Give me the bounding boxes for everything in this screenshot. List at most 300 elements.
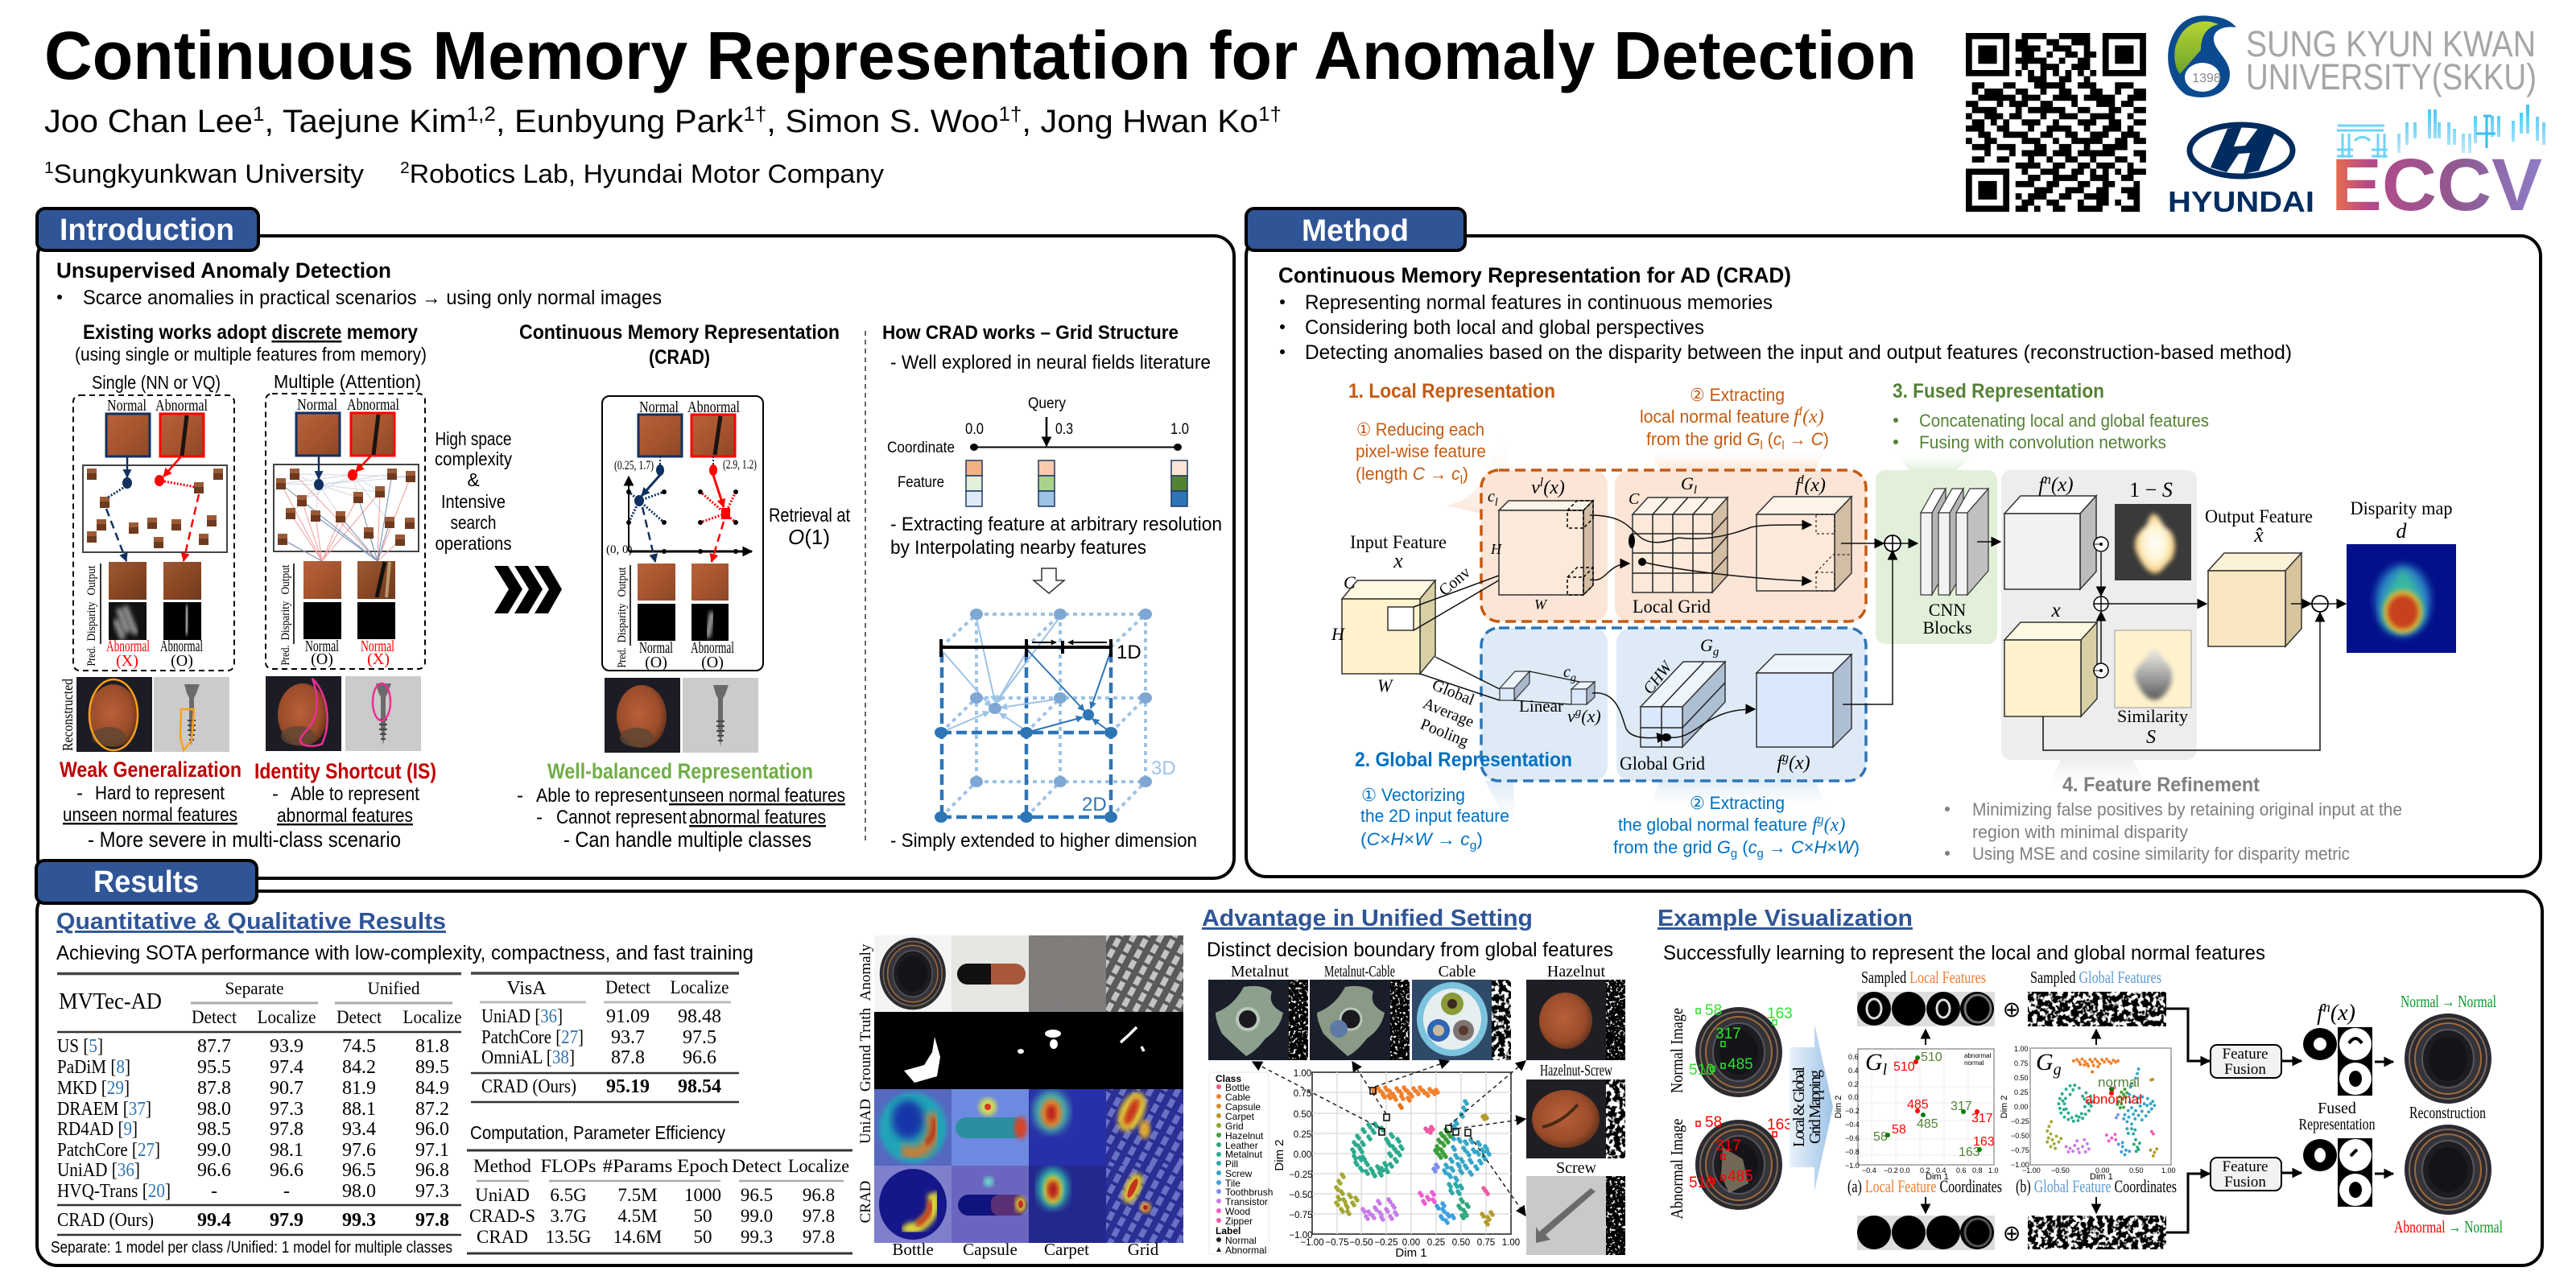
table: computation: UniAD <box>475 1185 530 1205</box>
text: well-balanced representation: - <box>536 807 543 828</box>
heading: existing works: Multiple (Attention) <box>274 371 421 392</box>
table: MVTec-AD: HVQ-Trans [20] <box>57 1181 171 1202</box>
diagram: continuous memory CRAD: Normal <box>639 639 673 657</box>
text: identity shortcut: abnormal features <box>277 805 413 827</box>
images: input bottles with points: 58 <box>1705 1002 1722 1019</box>
authors: 1,2 <box>467 103 496 126</box>
table: MVTec-AD: - <box>211 1181 217 1202</box>
table: VisA: 97.5 <box>683 1027 716 1048</box>
diagram: single memory retrieval: Abnormal <box>155 397 208 415</box>
table: computation: 14.6M <box>613 1227 662 1247</box>
images: unified setting samples: Metalnut-Cable <box>1324 963 1395 980</box>
authors: , Taejune Kim <box>264 104 467 139</box>
table: MVTec-AD: 97.8 <box>270 1119 303 1140</box>
images: unified setting samples: Metalnut <box>1231 963 1290 980</box>
diagram: local branch <box>1488 473 1852 617</box>
table: computation: 99.3 <box>741 1227 773 1247</box>
table: computation: 50 <box>694 1206 712 1226</box>
table: computation: 1000 <box>684 1185 721 1205</box>
heading tab: Results <box>36 861 257 903</box>
table: MVTec-AD: Detect <box>336 1007 382 1027</box>
images: unified setting samples: Screw <box>1556 1159 1597 1177</box>
legend: Toothbrush <box>1225 1187 1273 1198</box>
diagram: 1D 2D 3D grid: 2D <box>1082 794 1107 815</box>
chart: global feature t-SNE: Dim 1 <box>1395 1246 1427 1260</box>
text: complexity note: High space <box>435 428 512 449</box>
chart: local feature coordinates: G <box>1865 1049 1883 1075</box>
table: MVTec-AD: 87.2 <box>415 1099 449 1120</box>
images: unified setting samples: Cable <box>1439 963 1476 980</box>
text: retrieval at O(1): Retrieval at <box>769 505 850 526</box>
table: MVTec-AD: 99.3 <box>342 1210 376 1231</box>
bullet: scarce anomalies: Scarce anomalies in practical scenarios → using only normal images <box>83 287 662 309</box>
diagram: multiple memory attention: (O) <box>311 650 333 668</box>
table: VisA: PatchCore [27] <box>481 1027 584 1048</box>
table: MVTec-AD: 97.1 <box>415 1140 449 1161</box>
images: input bottles with points: 510 <box>1689 1062 1715 1079</box>
table: VisA: 98.54 <box>678 1076 721 1097</box>
diagram: local branch: C <box>1629 490 1640 508</box>
text: fused representation: Fusing with convolution networks <box>1919 432 2166 452</box>
legend: Label <box>1216 1225 1241 1236</box>
chart: local feature coordinates: −0.4 <box>1845 1121 1860 1129</box>
chart: global feature t-SNE: −0.25 <box>1289 1170 1313 1180</box>
text: local representation: pixel-wise feature <box>1356 441 1486 461</box>
text: complexity note: Intensive <box>441 491 506 512</box>
chart: global feature coordinates: Dim 1 <box>2090 1172 2113 1182</box>
diagram: local branch: (x) <box>1543 477 1565 498</box>
diagram: 1D coordinate interpolation <box>887 395 1189 506</box>
images: unified setting samples: Hazelnut <box>1547 963 1606 980</box>
chart: global feature coordinates: 0.00 <box>2095 1166 2110 1174</box>
text: complexity note: operations <box>435 533 512 554</box>
text: fused representation <box>1893 380 2209 452</box>
diagram: global branch: CHW <box>1640 657 1677 698</box>
chart: global feature coordinates: 1.00 <box>2014 1045 2029 1053</box>
text: well-balanced representation: Able to represent <box>536 785 667 807</box>
image grid: qualitative results: Ground Truth <box>857 1008 874 1092</box>
text: fused representation: Concatenating local and global features <box>1919 411 2209 431</box>
logo: Hyundai <box>2168 125 2314 218</box>
table: MVTec-AD: 74.5 <box>342 1036 376 1057</box>
chart: global feature t-SNE: 0.25 <box>1427 1238 1445 1248</box>
chart: global feature t-SNE: 0.50 <box>1294 1110 1311 1120</box>
text: table note: Separate: 1 model per class /Unified: 1 model for multiple classes <box>51 1239 452 1257</box>
text: identity shortcut: - <box>272 783 279 805</box>
table: MVTec-AD: 98.1 <box>270 1140 303 1161</box>
diagram: continuous memory CRAD: (0, 0) <box>606 543 633 556</box>
diagram: continuous memory CRAD: (0.25, 1.7) <box>614 459 654 473</box>
chart: global feature coordinates: 0.25 <box>2014 1088 2029 1096</box>
arrow: local and global grid mapping <box>1790 1024 1833 1191</box>
legend: Class <box>1216 1073 1241 1084</box>
images: input bottles with points: 485 <box>1728 1056 1753 1073</box>
diagram: 1D coordinate interpolation: Feature <box>898 474 944 491</box>
table: MVTec-AD: 98.5 <box>197 1119 231 1140</box>
heading tab: Method: Method <box>1302 214 1409 248</box>
image grid: qualitative results: UniAD <box>857 1099 874 1144</box>
chart: global feature coordinates: −0.50 <box>2051 1166 2070 1174</box>
heading: computation efficiency: Computation, Parameter Efficiency <box>470 1122 725 1143</box>
bullets: method summary: Representing normal features in continuous memories <box>1305 291 1773 314</box>
diagram: CNN blocks: Blocks <box>1922 617 1972 638</box>
images: input bottles with points: 317 <box>1715 1137 1741 1154</box>
text: global representation <box>1355 749 1860 861</box>
chart: global feature coordinates: −0.50 <box>2011 1132 2029 1140</box>
images: reconstruction: Abnormal → Normal <box>2394 1217 2503 1236</box>
images: input bottles with points: 163 <box>1767 1117 1793 1133</box>
text: global representation: c <box>1748 837 1757 857</box>
diagram: global branch: g <box>1575 706 1582 719</box>
diagram: continuous memory CRAD <box>602 396 763 671</box>
text: global representation: C×H×W) <box>1791 837 1860 857</box>
chart: global feature coordinates <box>2000 1045 2176 1182</box>
chart: global feature t-SNE: −0.50 <box>1289 1191 1313 1200</box>
authors: , Eunbyung Park <box>496 104 744 139</box>
table: MVTec-AD: 95.5 <box>197 1057 231 1078</box>
scatter points <box>1336 1088 1491 1222</box>
chart: global feature coordinates: abnormal <box>2085 1092 2142 1107</box>
table: computation: 96.8 <box>803 1185 835 1205</box>
box: feature fusion top: Feature <box>2223 1046 2268 1063</box>
chart: global feature coordinates: Dim 2 <box>2000 1096 2009 1118</box>
diagram: feature refinement block <box>2004 472 2320 750</box>
diagram: global branch: v <box>1567 706 1575 726</box>
table: VisA <box>471 973 739 1102</box>
text: local representation: l <box>1781 439 1785 452</box>
authors: 1† <box>999 103 1022 126</box>
chart: global feature coordinates: −1.00 <box>2011 1161 2029 1169</box>
chart: local feature coordinates: 0.8 <box>1972 1166 1983 1174</box>
text: global representation: → <box>1764 837 1791 857</box>
text: simply extended: - Simply extended to higher dimension <box>890 830 1197 852</box>
table: computation: 7.5M <box>617 1185 658 1205</box>
table: MVTec-AD: Unified <box>367 978 420 998</box>
table: MVTec-AD: Localize <box>402 1007 462 1027</box>
diagram: local branch: v <box>1531 477 1540 498</box>
text: weak generalization <box>60 758 242 826</box>
text: global representation: the global normal feature <box>1618 815 1807 835</box>
diagram: multiple memory attention: Normal <box>361 638 394 655</box>
images: fused representation <box>2299 999 2375 1207</box>
chart: global feature t-SNE: −0.75 <box>1325 1238 1349 1248</box>
table: MVTec-AD: 97.3 <box>415 1181 449 1202</box>
chart: local feature coordinates: l <box>1883 1061 1888 1079</box>
diagram: input feature cuboid: Conv <box>1435 564 1474 600</box>
logo text: Sungkyunkwan University: UNIVERSITY(SKKU) <box>2246 56 2537 97</box>
text: complexity note: complexity <box>435 448 512 469</box>
diagram: global branch: g <box>1571 672 1576 684</box>
labels: sampled features <box>1861 968 2161 987</box>
legend: Bottle <box>1225 1082 1250 1093</box>
text: identity shortcut: Able to represent <box>291 783 419 805</box>
chart: global feature t-SNE: Dim 2 <box>1273 1139 1286 1171</box>
feature strips: top <box>1857 992 2166 1026</box>
table: MVTec-AD: DRAEM [37] <box>57 1099 151 1120</box>
chart: global feature t-SNE: 1.00 <box>1294 1069 1311 1079</box>
chart: global feature coordinates: G <box>2036 1049 2054 1075</box>
heading: example visualization: Example Visualization <box>1657 906 1913 931</box>
text: complexity note <box>435 428 512 554</box>
chart: local feature coordinates: −0.2 <box>1845 1107 1860 1115</box>
table: MVTec-AD: 97.9 <box>270 1210 303 1231</box>
diagram: continuous memory CRAD: Output <box>616 567 629 597</box>
text: well-balanced representation: Cannot represent <box>556 807 687 828</box>
chart: global feature coordinates: −0.75 <box>2011 1146 2029 1154</box>
chart: local feature coordinates: abnormal <box>1964 1052 1992 1059</box>
text: feature refinement <box>1945 774 2402 864</box>
chart: local feature coordinates: 0.2 <box>1848 1080 1859 1088</box>
images: input bottles with points: 58 <box>1705 1114 1722 1131</box>
text: local representation: from the grid G <box>1646 429 1761 449</box>
text: well explored: - Well explored in neural fields literature <box>890 352 1211 374</box>
diagram: input feature cuboid: H <box>1331 624 1345 644</box>
chart: local feature coordinates: 510 <box>1921 1051 1942 1064</box>
images: reconstructed CRAD <box>605 678 758 753</box>
text: feature refinement: Minimizing false positives by retaining original input at the <box>1972 799 2402 819</box>
text: global representation: ) <box>1476 829 1483 849</box>
images: input bottles with points: 163 <box>1767 1005 1793 1022</box>
image grid: qualitative results: Anomaly <box>857 943 874 1001</box>
diagram: input feature cuboid: Pooling <box>1418 716 1471 750</box>
table: MVTec-AD: 87.7 <box>197 1036 231 1057</box>
legend: Hazelnut <box>1225 1130 1264 1141</box>
text: global representation: the 2D input feature <box>1360 806 1509 826</box>
images: fused representation: Fused <box>2318 1100 2356 1117</box>
table: MVTec-AD: RD4AD [9] <box>57 1119 138 1140</box>
diagram: feature refinement block: 1 − S <box>2129 478 2173 502</box>
row: anomaly images <box>874 935 1183 1012</box>
diagram: local branch: l <box>1540 476 1544 489</box>
table: MVTec-AD: 99.4 <box>197 1210 231 1231</box>
text: global representation: 2. Global Representation <box>1355 749 1572 771</box>
logo text: Sungkyunkwan University: SUNG KYUN KWAN <box>2246 23 2536 64</box>
text: well-balanced representation: abnormal features <box>689 807 826 828</box>
text: global representation: g <box>1731 847 1737 861</box>
diagram: global branch: Linear <box>1519 696 1563 716</box>
chart: global feature coordinates: 0.00 <box>2014 1103 2029 1111</box>
chart: global feature coordinates: 0.50 <box>2014 1074 2029 1082</box>
table: MVTec-AD: 98.0 <box>342 1181 376 1202</box>
diagram: local branch: G <box>1681 473 1694 493</box>
text: weak generalization: unseen normal features <box>63 804 237 826</box>
text: feature refinement: 4. Feature Refinement <box>2062 774 2260 796</box>
heading: unsupervised anomaly detection: Unsupervised Anomaly Detection <box>56 258 391 283</box>
legend: Screw <box>1225 1168 1253 1179</box>
table: MVTec-AD: Separate <box>225 978 283 998</box>
chart: global feature t-SNE: 0.00 <box>1402 1238 1420 1248</box>
text: weak generalization: Hard to represent <box>95 782 225 804</box>
text: retrieval at O(1) <box>769 505 850 549</box>
diagram: 1D 2D 3D grid: 3D <box>1151 758 1176 779</box>
text: local representation: (length C → c <box>1356 464 1460 484</box>
bullets: method summary <box>1280 291 2292 364</box>
chart: local feature coordinates: 0.2 <box>1920 1166 1930 1174</box>
diagram: input feature cuboid: Average <box>1420 695 1476 731</box>
affiliations <box>44 159 884 188</box>
diagram: continuous memory CRAD: Pred. <box>616 647 629 668</box>
heading: how CRAD works: How CRAD works – Grid Structure <box>882 322 1179 344</box>
diagram: feature refinement block: n <box>2044 472 2051 487</box>
heading tab: Method <box>1246 208 1465 250</box>
table: MVTec-AD: 96.6 <box>197 1160 231 1181</box>
title: Continuous Memory Representation for Anomaly Detection <box>44 18 1917 93</box>
text: identity shortcut: Identity Shortcut (IS) <box>254 759 436 783</box>
text: well-balanced representation: Well-balanced Representation <box>547 759 813 783</box>
table: MVTec-AD: 97.6 <box>342 1140 376 1161</box>
text: feature refinement: Using MSE and cosine similarity for disparity metric <box>1972 844 2350 864</box>
chart: local feature coordinates: Dim 1 <box>1926 1172 1949 1182</box>
table: MVTec-AD: PaDiM [8] <box>57 1057 130 1078</box>
chart: local feature coordinates: 58 <box>1873 1130 1888 1144</box>
chart: local feature coordinates: −0.4 <box>1862 1166 1876 1174</box>
table: VisA: 91.09 <box>606 1006 650 1027</box>
text: global representation: g <box>1818 813 1824 827</box>
authors: , Jong Hwan Ko <box>1022 104 1258 139</box>
diagram: global branch: (x) <box>1789 753 1810 774</box>
images: fused representation: n <box>2323 999 2330 1015</box>
images: reconstruction <box>2394 992 2503 1236</box>
heading: existing works: Existing works adopt discrete memory <box>83 321 418 344</box>
text: global representation: f <box>1812 815 1818 836</box>
diagram: output feature: x̂ <box>2253 523 2264 547</box>
chart: global feature coordinates: −0.25 <box>2011 1117 2029 1125</box>
chart: global feature coordinates: 0.50 <box>2129 1166 2144 1174</box>
heading: quantitative results: Quantitative & Qualitative Results <box>56 909 446 935</box>
table: VisA: VisA <box>506 978 547 999</box>
text: weak generalization: - <box>76 782 83 804</box>
diagram: global branch: (x) <box>1581 706 1601 726</box>
chart: local feature coordinates: 485 <box>1907 1098 1929 1112</box>
images: input bottles with points: 485 <box>1728 1168 1753 1185</box>
affiliations: Sungkyunkwan University <box>54 159 364 188</box>
images: input bottles with points: Normal Image <box>1667 1008 1686 1093</box>
table: MVTec-AD: 89.5 <box>415 1057 449 1078</box>
table: VisA: Localize <box>670 977 729 997</box>
diagram: input feature cuboid <box>1331 532 1521 750</box>
table: VisA: UniAD [36] <box>481 1006 563 1027</box>
image grid: qualitative results: Carpet <box>1044 1240 1089 1259</box>
text: extracting feature <box>890 514 1222 559</box>
text: local representation: l <box>1460 473 1463 487</box>
chart: local feature coordinates: Dim 2 <box>1834 1096 1843 1118</box>
table: VisA: Detect <box>605 977 651 997</box>
diagram: feature refinement block: Similarity <box>2117 706 2188 726</box>
chart: local feature coordinates: 0.0 <box>1848 1093 1859 1101</box>
affiliations: Robotics Lab, Hyundai Motor Company <box>410 159 884 188</box>
box: feature fusion top: Fusion <box>2224 1061 2266 1078</box>
table: MVTec-AD: Detect <box>192 1007 237 1027</box>
table: MVTec-AD: CRAD (Ours) <box>57 1210 154 1231</box>
heading: advantage unified: Advantage in Unified Setting <box>1202 906 1533 931</box>
table: computation: 97.8 <box>803 1227 835 1247</box>
images: reconstruction: Normal → Normal <box>2401 992 2496 1011</box>
table: MVTec-AD: 98.0 <box>197 1099 231 1120</box>
chart: local feature coordinates: −0.8 <box>1845 1148 1860 1156</box>
text: more severe: - More severe in multi-class scenario <box>88 828 401 852</box>
table: VisA: CRAD (Ours) <box>481 1076 576 1097</box>
text: local representation: l <box>1799 405 1803 419</box>
table: MVTec-AD: 96.0 <box>415 1119 449 1140</box>
diagram: local branch: W <box>1534 597 1548 613</box>
chart: global feature coordinates: 1.00 <box>2161 1166 2176 1174</box>
feature strips: top: ⊕ <box>2003 997 2021 1022</box>
legend: Transistor <box>1225 1196 1268 1208</box>
diagram: output feature <box>2205 506 2346 646</box>
diagram: global branch: f <box>1777 753 1782 774</box>
text: local representation: f <box>1794 407 1799 427</box>
images: unified setting samples <box>1208 963 1625 1255</box>
diagram: continuous memory CRAD: Normal <box>639 398 679 416</box>
text: well-balanced representation: unseen normal features <box>669 785 845 807</box>
text: global representation: ② Extracting <box>1690 793 1785 813</box>
text: local representation: ② Extracting <box>1690 385 1785 405</box>
diagram: global branch: g <box>1782 751 1789 765</box>
text: extracting feature: by Interpolating nearby features <box>890 537 1146 559</box>
diagram: single memory retrieval <box>73 395 234 671</box>
box: feature fusion top <box>2211 1045 2281 1078</box>
authors: Joo Chan Lee <box>44 104 245 139</box>
diagram: multiple memory attention: (X) <box>367 650 390 668</box>
table: computation: Method <box>473 1156 531 1176</box>
table: MVTec-AD: 84.9 <box>415 1078 449 1099</box>
chart: local feature coordinates: 0.4 <box>1936 1166 1946 1174</box>
bullets: method summary: Detecting anomalies based on the disparity between the input and output features (reconstruction-based method) <box>1305 341 2292 364</box>
chart: local feature coordinates: 0.4 <box>1848 1067 1859 1075</box>
text: global representation: (x) <box>1824 815 1845 836</box>
table: computation: 50 <box>694 1227 712 1247</box>
images: input bottles with points <box>1667 1002 1793 1219</box>
box: feature fusion bottom: Fusion <box>2224 1174 2266 1191</box>
text: achieving SOTA: Achieving SOTA performance with low-complexity, compactness, and fast training <box>56 942 753 964</box>
image grid: qualitative results <box>857 935 1183 1259</box>
table: computation: #Params <box>602 1156 673 1176</box>
diagram: output feature: Output Feature <box>2205 506 2313 526</box>
heading: CRAD <box>519 321 840 369</box>
diagram: feature refinement block: x <box>2050 600 2061 621</box>
chart: global feature t-SNE: 0.25 <box>1294 1130 1311 1140</box>
diagram: multiple memory attention <box>266 394 425 669</box>
table: computation: CRAD <box>477 1227 528 1247</box>
text: successfully learning: Successfully learning to represent the local and global normal features <box>1663 942 2265 964</box>
legend: Metalnut <box>1225 1149 1263 1160</box>
images: input bottles with points: 317 <box>1715 1026 1741 1042</box>
labels: sampled features: Sampled Local Features <box>1861 968 1986 987</box>
authors: 1 <box>253 103 264 126</box>
images: fused representation: f <box>2317 1001 2323 1026</box>
diagram: 1D 2D 3D grid <box>935 609 1176 823</box>
chart: global feature t-SNE <box>1209 1061 1525 1260</box>
text: local representation: ) <box>1463 464 1468 484</box>
feature strips: bottom: ⊕ <box>2003 1221 2021 1245</box>
diagram: local branch: c <box>1488 488 1495 506</box>
diagram: feature refinement block: f <box>2038 474 2044 496</box>
panel: introduction <box>37 208 1234 878</box>
images: input bottles with points: Abnormal Image <box>1667 1119 1686 1219</box>
arrow: local and global grid mapping: Local & Global <box>1790 1067 1808 1147</box>
table: MVTec-AD: PatchCore [27] <box>57 1140 160 1161</box>
table: computation: 3.7G <box>550 1206 587 1226</box>
images: reconstruction: Reconstruction <box>2409 1103 2486 1122</box>
diagram: local branch: H <box>1490 541 1502 557</box>
diagram: 1D coordinate interpolation: 1.0 <box>1170 421 1189 438</box>
authors: 1† <box>1258 103 1282 126</box>
chart: global feature t-SNE: −1.00 <box>1300 1238 1324 1248</box>
diagram: continuous memory CRAD: (O) <box>701 654 724 671</box>
diagram: multiple memory attention: Pred. <box>279 646 292 665</box>
captions: coordinates: (b) Global Feature Coordinates <box>2016 1176 2177 1196</box>
text: local representation: (x) <box>1802 407 1824 427</box>
